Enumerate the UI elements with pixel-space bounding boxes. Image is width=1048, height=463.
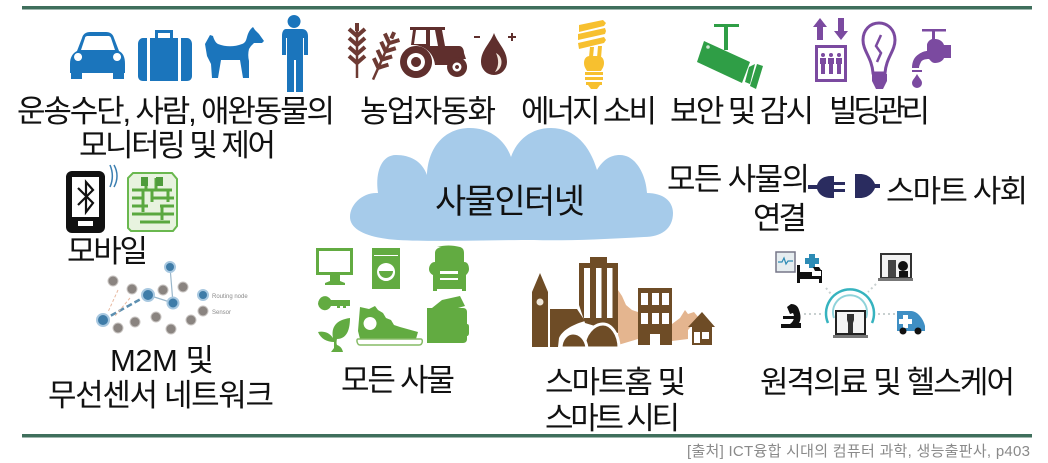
panel: M2M and wireless sensor networks bbox=[48, 262, 274, 413]
icon: light bulb bbox=[863, 23, 895, 89]
chart: network diagram bbox=[97, 262, 248, 334]
panel: transport, people and pets bbox=[17, 15, 335, 163]
panel: security bbox=[670, 24, 814, 129]
panel: connecting all things, smart society bbox=[667, 162, 1028, 236]
icon: dog bbox=[205, 27, 264, 78]
shape: cloud bbox=[350, 128, 673, 241]
label: M2M: M2M 및 bbox=[110, 343, 214, 378]
chart: network diagram: Sensor bbox=[212, 310, 231, 316]
icon: plug bbox=[808, 176, 845, 198]
icon: elevator bbox=[813, 18, 848, 82]
panel: mobile bbox=[66, 165, 177, 269]
label: telemedicine: 원격의료 및 헬스케어 bbox=[760, 365, 1015, 400]
icon: suitcase bbox=[138, 30, 192, 81]
label: smart city: 스마트 시티 bbox=[545, 401, 680, 436]
label: smart society: 스마트 사회 bbox=[886, 174, 1028, 209]
icon: water drop with plus and minus bbox=[474, 33, 516, 75]
panel: agriculture bbox=[349, 23, 516, 129]
label: building management: 빌딩관리 bbox=[829, 94, 930, 129]
icons: household objects bbox=[316, 246, 469, 352]
panel: cloud bbox=[350, 128, 673, 241]
chart: network diagram: Routing node bbox=[212, 294, 248, 300]
panel: energy consumption bbox=[521, 20, 657, 129]
source note: [출처] ICT융합 시대의 컴퓨터 과학, 생능출판사, p403 bbox=[687, 443, 1030, 460]
label: energy: 에너지 소비 bbox=[521, 94, 657, 129]
icon: telemedicine network bbox=[776, 252, 925, 338]
panel: building management bbox=[813, 18, 951, 129]
icon: car bbox=[70, 32, 125, 79]
label: smart home: 스마트홈 및 bbox=[545, 365, 686, 400]
icon: city skyline bbox=[532, 257, 715, 348]
panel: all things bbox=[316, 246, 469, 398]
label: connecting all things: 모든 사물의 bbox=[667, 162, 810, 197]
label: security: 보안 및 감시 bbox=[670, 94, 814, 129]
label: transport: 운송수단, 사람, 애완동물의 bbox=[17, 94, 335, 129]
icon: wheat bbox=[349, 23, 401, 83]
heading: internet of things: 사물인터넷 bbox=[435, 183, 585, 221]
icon: circuit board bbox=[128, 173, 177, 231]
icon: tractor bbox=[400, 27, 467, 78]
label: monitoring: 모니터링 및 제어 bbox=[79, 128, 276, 163]
label: mobile: 모바일 bbox=[67, 234, 148, 269]
icon: person bbox=[282, 15, 308, 92]
icon: security camera bbox=[697, 24, 763, 89]
label: agriculture: 농업자동화 bbox=[360, 94, 496, 129]
label: all things: 모든 사물 bbox=[341, 363, 455, 398]
icon: faucet and drop bbox=[912, 29, 951, 88]
icon: smartphone with bluetooth bbox=[66, 165, 117, 233]
label: connection: 연결 bbox=[753, 201, 807, 236]
panel: telemedicine and healthcare bbox=[760, 252, 1015, 400]
panel: smart home and smart city bbox=[532, 257, 715, 436]
icon: compact fluorescent bulb bbox=[578, 20, 606, 89]
label: wireless sensor network: 무선센서 네트워크 bbox=[48, 378, 274, 413]
icon: socket bbox=[855, 174, 880, 198]
